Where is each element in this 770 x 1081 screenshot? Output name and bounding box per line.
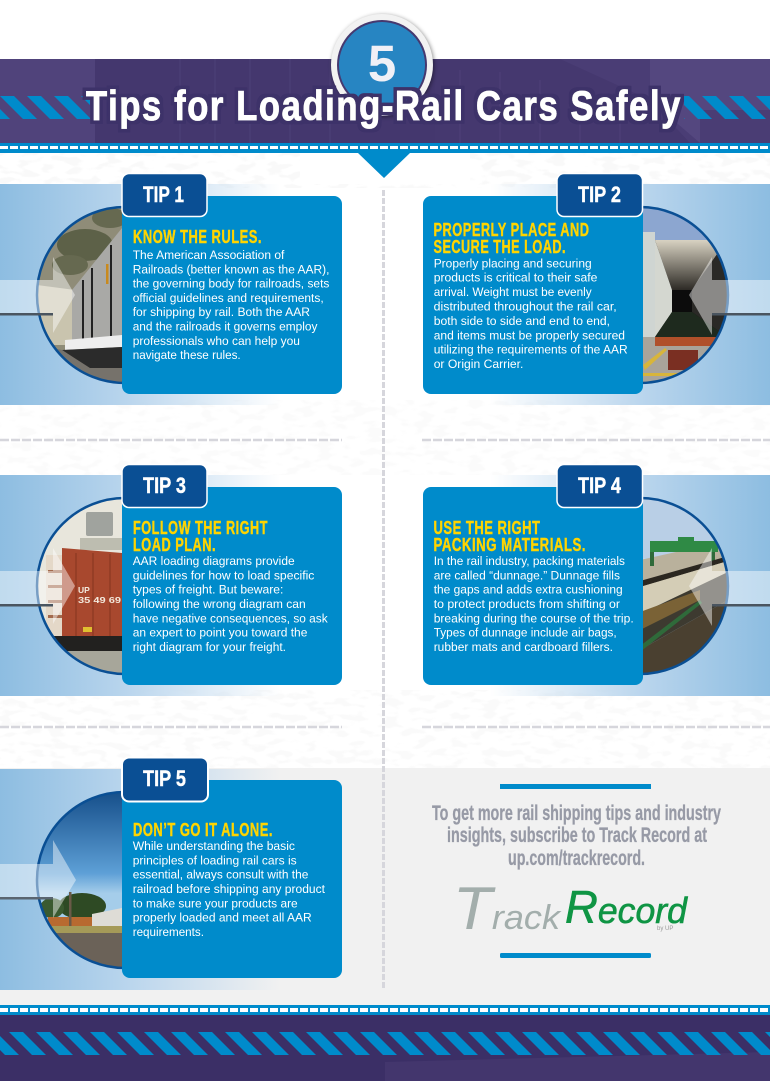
panel: tip 4: [423, 464, 770, 696]
number badge: 5: 5: [368, 35, 396, 92]
body text: both side to side and end to end,: [434, 314, 610, 328]
number badge: 5: [331, 14, 433, 116]
tab: [122, 758, 208, 802]
logo: Track Record: Track: [453, 875, 562, 942]
heading: PROPERLY PLACE AND: [434, 220, 590, 240]
body text: Types of dunnage include air bags,: [434, 626, 617, 640]
panel: subscribe call to action: [432, 784, 721, 958]
body text: rubber mats and cardboard fillers.: [434, 640, 613, 654]
tab: TIP 4: [578, 473, 622, 498]
tab: TIP 3: [143, 473, 186, 498]
body text: the governing body for railroads, sets: [133, 277, 329, 291]
arrow: [0, 257, 75, 333]
body text: principles of loading rail cars is: [133, 853, 297, 867]
header rail line: [0, 143, 770, 153]
heading: [133, 518, 268, 555]
tab: [122, 464, 207, 508]
arrow: [689, 548, 770, 626]
body text: AAR loading diagrams provide: [133, 554, 295, 568]
arrow: [689, 257, 770, 335]
body text: official guidelines and requirements,: [133, 291, 324, 305]
logo: Track Record: by UP: [657, 926, 673, 932]
body text: to make sure your products are: [133, 896, 298, 910]
heading: SECURE THE LOAD.: [434, 237, 566, 257]
body text: Properly placing and securing: [434, 256, 592, 270]
dashed dividers: [0, 190, 770, 990]
body text: distributed throughout the rail car,: [434, 300, 617, 314]
body text: breaking during the course of the trip.: [434, 611, 634, 625]
body text: [133, 839, 326, 939]
logo: Track Record: Record: [565, 881, 688, 933]
body text: an expert to point you toward the: [133, 626, 308, 640]
heading: FOLLOW THE RIGHT: [133, 518, 268, 538]
tab: TIP 2: [578, 182, 621, 207]
body text: products is critical to their safe: [434, 271, 598, 285]
body text: following the wrong diagram can: [133, 597, 306, 611]
body text: and the railroads it governs employ: [133, 320, 318, 334]
body text: [133, 248, 329, 362]
body text: or Origin Carrier.: [434, 357, 523, 371]
heading: [434, 220, 590, 257]
photo: rail construction site: [643, 504, 727, 673]
photo: open container: [640, 207, 730, 385]
photo: red hopper car: 35 49 69: [78, 595, 121, 605]
body text: to protect products from shifting or: [434, 597, 620, 611]
body text: requirements.: [133, 925, 204, 939]
heading: [434, 518, 586, 555]
body text: [133, 554, 329, 654]
photo: train under blue sky: [37, 792, 127, 970]
body text: [434, 256, 628, 371]
tab: [557, 174, 642, 216]
body text: right diagram for your freight.: [133, 640, 286, 654]
heading: LOAD PLAN.: [133, 535, 216, 555]
heading: USE THE RIGHT: [434, 518, 540, 538]
panel: tip 1: [0, 174, 342, 405]
photo: double-stack train: [37, 207, 128, 383]
panel: tip 5: [0, 758, 342, 990]
body text: types of freight. But beware:: [133, 583, 283, 597]
tab: TIP 5: [143, 766, 186, 791]
body text: The American Association of: [133, 248, 285, 262]
heading: KNOW THE RULES.: [133, 227, 262, 247]
logo: Track Record: [453, 875, 688, 942]
body text: the gaps and adds extra cushioning: [434, 583, 623, 597]
tab: TIP 1: [143, 182, 184, 207]
body text: railroad before shipping any product: [133, 882, 326, 896]
body text: properly loaded and meet all AAR: [133, 911, 312, 925]
panel: tip 2: [423, 174, 770, 405]
body text: have negative consequences, so ask: [133, 611, 329, 625]
heading: DON’T GO IT ALONE.: [133, 820, 273, 840]
body text: utilizing the requirements of the AAR: [434, 343, 628, 357]
photo: red hopper car: UP: [78, 585, 90, 595]
body text: and items must be properly secured: [434, 328, 625, 342]
call to action text: [432, 802, 721, 870]
body text: While understanding the basic: [133, 839, 295, 853]
call to action text: up.com/trackrecord.: [508, 847, 645, 870]
panel: tip 3: [0, 464, 342, 696]
body text: [434, 554, 634, 654]
footer banner: [0, 1005, 770, 1081]
tab: [122, 174, 207, 216]
body text: for shipping by rail. Both the AAR: [133, 305, 310, 319]
body text: essential, always consult with the: [133, 868, 309, 882]
header banner: [0, 59, 770, 143]
tab: [557, 464, 642, 508]
body text: In the rail industry, packing materials: [434, 554, 625, 568]
photo: red hopper car: [37, 498, 127, 676]
body text: guidelines for how to load specific: [133, 568, 314, 582]
arrow: [0, 548, 75, 624]
body text: Railroads (better known as the AAR),: [133, 262, 329, 276]
body text: are called “dunnage.” Dunnage fills: [434, 568, 620, 582]
arrow: [0, 840, 76, 918]
header stripes: left and right: [0, 96, 770, 119]
heading: PACKING MATERIALS.: [434, 535, 586, 555]
pointer triangle: [358, 153, 410, 178]
body text: navigate these rules.: [133, 348, 241, 362]
body text: arrival. Weight must be evenly: [434, 285, 593, 299]
body text: professionals who can help you: [133, 334, 300, 348]
